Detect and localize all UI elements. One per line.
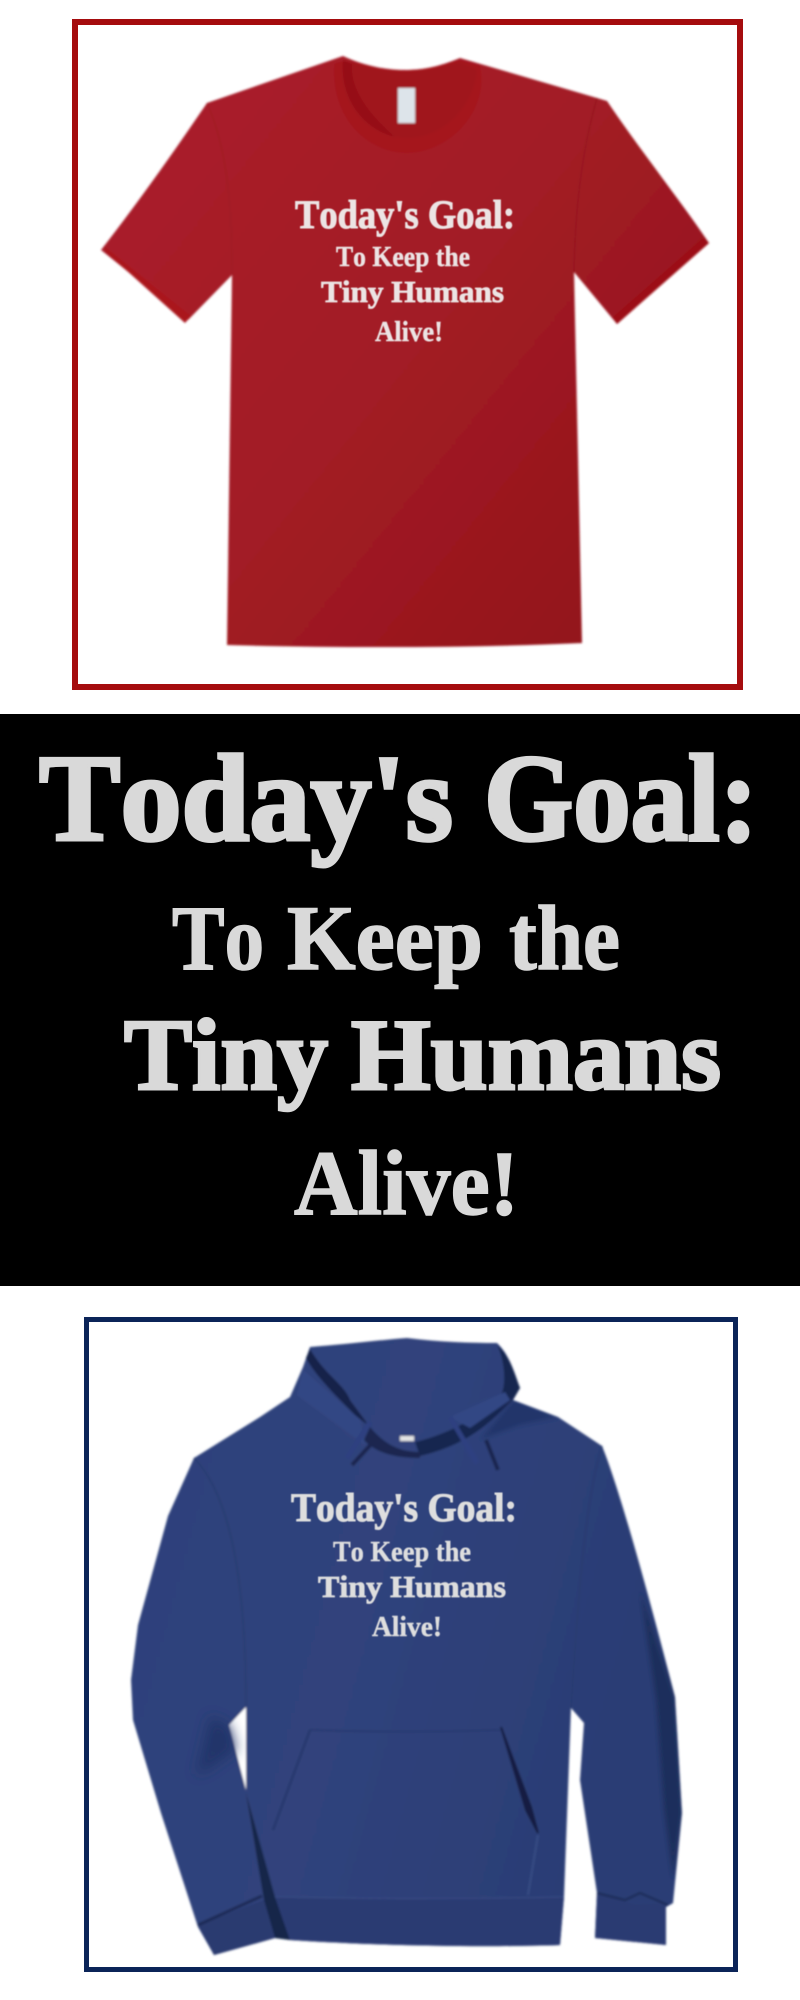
t-shirt slogan <box>295 192 515 348</box>
hoodie slogan: To Keep the <box>333 1537 471 1568</box>
heading: Today's Goal <box>39 730 758 867</box>
hoodie slogan: Tiny Humans <box>318 1569 506 1604</box>
text: To Keep the <box>172 887 620 989</box>
heading: Today's Goal: Today's <box>39 730 453 867</box>
hoodie slogan: Today's Goal: <box>291 1485 517 1530</box>
text: Tiny Humans <box>124 999 721 1112</box>
arm shadows <box>196 1590 682 1880</box>
hoodie slogan <box>291 1485 517 1643</box>
panel: hoodie product frame <box>86 1320 736 1970</box>
drawstrings <box>347 1417 477 1463</box>
text: To Keep the: Keep <box>287 887 483 989</box>
t-shirt slogan: To Keep the <box>336 242 470 273</box>
t-shirt slogan: Alive! <box>375 317 443 348</box>
cuffs <box>198 1900 275 1955</box>
text: To Keep the: To <box>172 887 264 989</box>
icon: red t-shirt <box>101 56 709 647</box>
text: Alive: Alive! <box>294 1132 519 1234</box>
hoodie slogan: Alive! <box>372 1612 442 1643</box>
panel: t-shirt product frame <box>75 22 740 687</box>
pocket <box>310 1730 501 1732</box>
heading: Today's Goal: Goal: <box>484 730 758 867</box>
waist ribbing <box>275 1897 564 1946</box>
text: To Keep the: the <box>509 887 620 989</box>
text: Tiny Humans: Tiny <box>124 999 328 1112</box>
text: Tiny Humans: Humans <box>351 999 721 1112</box>
icon: navy hoodie <box>131 1338 682 1955</box>
t-shirt slogan: Today's Goal: <box>295 192 515 237</box>
panel: black slogan band <box>0 714 800 1286</box>
t-shirt slogan: Tiny Humans <box>321 274 504 309</box>
